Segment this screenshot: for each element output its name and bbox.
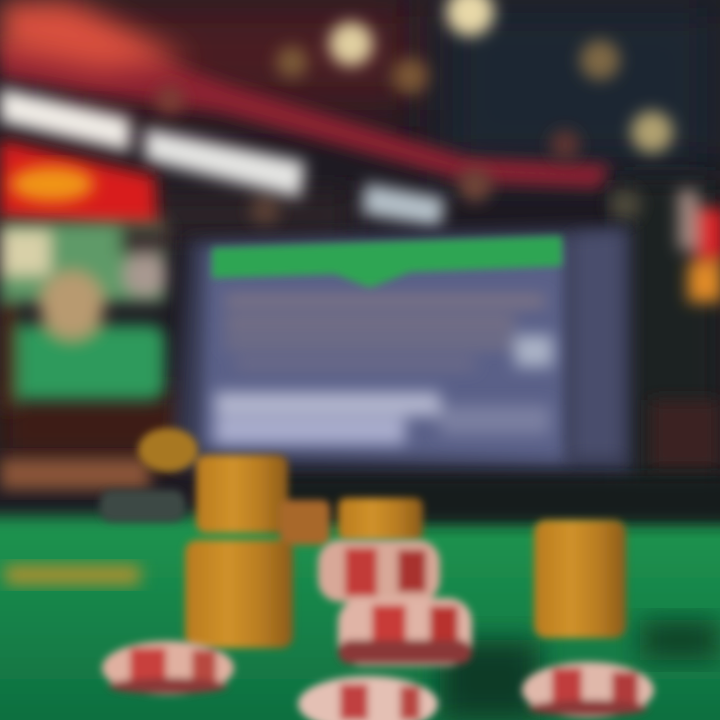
green table — [0, 476, 720, 720]
screen frame — [172, 226, 632, 478]
gold stack: right — [534, 520, 626, 638]
ceiling lights — [156, 0, 673, 225]
screen side — [572, 232, 622, 458]
gold stack: back — [338, 498, 423, 540]
wood counter — [0, 458, 150, 490]
gold stack: upper — [196, 455, 288, 533]
chip: stack lower — [338, 598, 472, 666]
white light strips — [0, 88, 445, 228]
red sign — [0, 140, 158, 234]
right edge sign — [650, 190, 720, 470]
green left panel — [0, 222, 170, 410]
chip: bottom centre — [298, 676, 438, 720]
screen table rows — [215, 296, 553, 444]
red and white chips — [102, 540, 654, 720]
red ceiling band — [0, 0, 610, 188]
chip: right — [522, 662, 654, 718]
screen — [172, 226, 632, 478]
chip: stack middle — [318, 540, 440, 602]
gold chip stacks — [100, 428, 626, 648]
screen body — [200, 240, 566, 462]
screen header — [212, 236, 562, 288]
chip: left — [102, 641, 234, 695]
gold stack: lower — [185, 540, 293, 648]
table text glow — [5, 565, 140, 585]
